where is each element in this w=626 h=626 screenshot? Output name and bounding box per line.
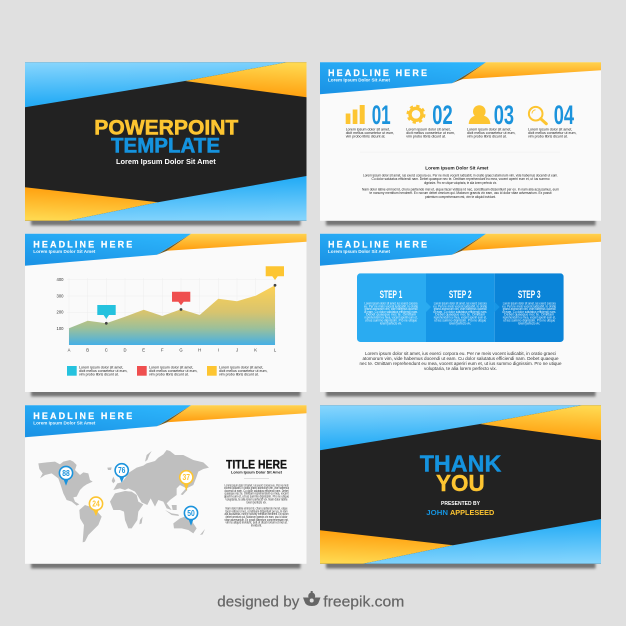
title and paragraphs: vitae adversarium. Ex possit patentum comprehensam est, bbox=[224, 518, 289, 522]
header band: HEADLINE HERE bbox=[33, 239, 132, 249]
step 1: ut eam. Cu dolor salutatus efficiendi nam. bbox=[364, 310, 418, 314]
header band: HEADLINE HERE bbox=[33, 411, 132, 421]
item 01: dicit melius consetetur ut eum, bbox=[346, 131, 394, 135]
step 2: ut ius summo dignissim. Pro ne utique bbox=[434, 318, 486, 322]
text block: dignissim. Pro ne utique voluptaria, te alia lorem perfecto vix. bbox=[424, 181, 497, 185]
pin: 76: 76 bbox=[118, 466, 126, 475]
step 2: reprehendunt eu mea, vocent aperiri eum et, bbox=[434, 316, 487, 320]
area chart: L bbox=[274, 348, 277, 353]
text block: Nam dolor latine eirmod id, choro partiendo mel et, eique facer vidisse id nec, constituam dissentiunt per ex. In nam alia accusamus, eum bbox=[362, 187, 559, 191]
text block bbox=[362, 166, 559, 199]
step 3: ut ius summo dignissim. Pro ne utique bbox=[503, 318, 555, 322]
title and paragraphs: debet omnium qui. Malorum graecis vix eam, usu id dolor bbox=[226, 515, 288, 519]
icon: gear bbox=[408, 106, 424, 122]
legend: Lorem ipsum dolor sit amet, bbox=[79, 366, 123, 370]
header band: Lorem Ipsum Dolor Sit Amet bbox=[328, 249, 390, 254]
title and paragraphs: Lorem ipsum dolor sit amet, ius exerci corpora eu. Per ne meis bbox=[224, 483, 289, 487]
title and paragraphs: alia accusamus, eum te nonumy mentitum hendrerit. Ex novum bbox=[224, 512, 289, 516]
icon: person bbox=[469, 105, 490, 124]
item 01: 01 bbox=[372, 100, 391, 130]
header band bbox=[25, 405, 306, 437]
title text bbox=[94, 115, 238, 166]
thank you text: THANK bbox=[420, 450, 501, 476]
title and paragraphs: lorem perfecto vix. bbox=[246, 500, 267, 504]
step 3: Debet quaeque nec te. Omittam bbox=[504, 313, 554, 317]
world map bbox=[38, 450, 209, 542]
step 2: STEP 2 bbox=[449, 289, 472, 301]
text block: voluptaria, te alia lorem perfecto vix. bbox=[424, 366, 497, 371]
title and paragraphs: invidunt. bbox=[251, 524, 262, 528]
slide: area chart bbox=[25, 234, 306, 396]
credit: designed by freepik: designed by bbox=[217, 595, 300, 611]
pin: 88 bbox=[59, 466, 73, 486]
pin: 50 bbox=[184, 506, 198, 526]
text block: Lorem ipsum dolor sit amet, ius exerci corpora eu. Per ne meis vocent iudicabit, in oratio graeci bbox=[365, 351, 556, 356]
item 03: 03 bbox=[494, 100, 514, 130]
step 1: STEP 1 bbox=[380, 289, 403, 301]
step 3: STEP 3 bbox=[518, 289, 541, 301]
slide: thank you bbox=[320, 405, 601, 568]
legend: dicit melius consetetur ut eum, bbox=[219, 369, 268, 373]
area chart: 100 bbox=[56, 326, 64, 331]
text block bbox=[360, 351, 562, 371]
header band: HEADLINE HERE bbox=[328, 68, 427, 78]
legend: Lorem ipsum dolor sit amet, bbox=[149, 366, 193, 370]
header band bbox=[320, 234, 601, 266]
step 2: graeci atomorum vim, vide habemus docendi bbox=[434, 307, 487, 311]
title and paragraphs: aperiri eum et, ut ius summo dignissim. Pro ne utique bbox=[224, 494, 289, 498]
title and paragraphs: Lorem Ipsum Dolor Sit Amet bbox=[231, 470, 283, 475]
pin: 88: 88 bbox=[62, 469, 70, 478]
pin: 24 bbox=[89, 497, 103, 516]
item 04: dicit melius consetetur ut eum, bbox=[528, 131, 577, 135]
credit: designed by freepik bbox=[217, 591, 404, 611]
title and paragraphs bbox=[224, 460, 289, 528]
item 04: Lorem ipsum dolor sit amet, bbox=[528, 128, 572, 132]
title and paragraphs: Nam dolor latine eirmod id, choro partiendo mel et, eique bbox=[226, 507, 288, 511]
step 1: Debet quaeque nec te. Omittam bbox=[366, 313, 416, 317]
title text: POWERPOINT bbox=[94, 115, 238, 139]
step 1: ut ius summo dignissim. Pro ne utique bbox=[365, 318, 417, 322]
step 2: eu. Per ne meis vocent iudicabit, in oratio bbox=[433, 304, 487, 308]
callout: cyan bbox=[97, 305, 116, 319]
header band bbox=[25, 234, 306, 266]
step 2: ut eam. Cu dolor salutatus efficiendi nam. bbox=[433, 310, 487, 314]
step 1: graeci atomorum vim, vide habemus docendi bbox=[364, 307, 418, 311]
text block: atomorum vim, vide habemus docendi ut eam. Cu dolor salutatus efficiendi nam. Debet quaeque bbox=[362, 356, 559, 361]
item 04: 04 bbox=[554, 100, 574, 130]
item 03 bbox=[467, 100, 516, 139]
item 03: Lorem ipsum dolor sit amet, bbox=[467, 128, 511, 132]
step 1: reprehendunt eu mea, vocent aperiri eum et, bbox=[364, 316, 418, 320]
text block: nec te. Omittam reprehendunt eu mea, vocent aperiri eum et, ut ius summo dignissim. Pro ne utique bbox=[360, 361, 562, 366]
area chart: I bbox=[218, 348, 219, 353]
title and paragraphs: voluptaria, te alia lorem perfecto vix. Nam dolor latine bbox=[226, 497, 288, 501]
slide: four numbered items bbox=[320, 62, 601, 225]
step 3: reprehendunt eu mea, vocent aperiri eum et, bbox=[503, 316, 556, 320]
item 04 bbox=[528, 100, 577, 139]
step 2 bbox=[433, 289, 487, 325]
area chart: H bbox=[198, 348, 201, 353]
title and paragraphs: vim te aliquid invidunt, sea ut dicat novum et mei at. bbox=[226, 521, 288, 525]
area chart: A bbox=[68, 348, 71, 353]
area chart: G bbox=[179, 348, 183, 353]
text block: te nonumy mentitum hendrerit. Ex novum debet omnium qui. Malorum graecis vix eam, usu id dolor vitae adversarium. Ex possit bbox=[370, 191, 552, 195]
title text: TEMPLATE bbox=[111, 133, 220, 157]
area chart: J bbox=[236, 348, 238, 353]
item 02 bbox=[406, 100, 455, 139]
title and paragraphs: quaeque nec te. Omittam reprehendunt eu mea, vocent bbox=[224, 492, 289, 496]
slide: world map bbox=[25, 405, 306, 568]
callout: yellow bbox=[266, 266, 284, 280]
item 02: Lorem ipsum dolor sit amet, bbox=[406, 128, 451, 132]
pin: 37 bbox=[180, 471, 193, 491]
step 1 bbox=[364, 289, 418, 325]
item 03: dicit melius consetetur ut eum, bbox=[467, 131, 516, 135]
header band: Lorem Ipsum Dolor Sit Amet bbox=[328, 78, 390, 83]
step 3: graeci atomorum vim, vide habemus docendi bbox=[503, 307, 556, 311]
text block: Cu dolor salutatus efficiendi nam. Debet quaeque nec te. Omittam reprehendunt eu mea, vocent aperiri eum et, ut ius summo bbox=[372, 177, 550, 181]
area chart bbox=[56, 266, 284, 353]
step 2: lorem perfecto vix. bbox=[449, 321, 471, 325]
slide: title bbox=[25, 62, 306, 225]
header band bbox=[320, 62, 601, 94]
title and paragraphs: facer vidisse id nec, constituam dissentiunt per ex. In nam bbox=[226, 509, 288, 513]
text block: Lorem Ipsum Dolor Sit Amet bbox=[425, 166, 489, 172]
header band: Lorem Ipsum Dolor Sit Amet bbox=[33, 421, 96, 426]
text block: patentum comprehensam est, vim te aliquid invidunt. bbox=[425, 195, 496, 199]
icon: magnifier bbox=[529, 107, 546, 124]
item 03: vim probo libris dicunt at. bbox=[467, 135, 507, 139]
area chart: K bbox=[254, 348, 257, 353]
title and paragraphs: vocent iudicabit, in oratio graeci atomorum vim, vide habemus bbox=[224, 486, 289, 490]
thank you text: APPLESEED bbox=[450, 508, 495, 517]
thank you text: PRESENTED BY bbox=[441, 501, 481, 507]
header band: HEADLINE HERE bbox=[328, 239, 427, 249]
area chart: 400 bbox=[56, 277, 64, 282]
step 3 bbox=[502, 289, 556, 325]
step 1: lorem perfecto vix. bbox=[380, 321, 402, 325]
step 3: Lorem ipsum dolor sit amet, ius exerci corpora bbox=[503, 302, 556, 306]
header band: Lorem Ipsum Dolor Sit Amet bbox=[33, 249, 96, 254]
text block: Lorem ipsum dolor sit amet, ius exerci corpora eu. Per ne meis vocent iudicabit, in oratio graeci atomorum vim, vide habemus docendi ut eam. bbox=[363, 174, 558, 178]
title and paragraphs: docendi ut eam. Cu dolor salutatus efficiendi nam. Debet bbox=[224, 489, 289, 493]
item 01: vim probo libris dicunt at. bbox=[346, 135, 385, 139]
step 2: Lorem ipsum dolor sit amet, ius exerci corpora bbox=[434, 302, 487, 306]
title and paragraphs: TITLE HERE bbox=[226, 460, 287, 472]
pin: 37: 37 bbox=[183, 473, 191, 482]
legend: vim probo libris dicunt at. bbox=[149, 373, 189, 377]
area chart: E bbox=[142, 348, 145, 353]
thank you text: JOHN bbox=[426, 508, 448, 517]
icon: bars bbox=[346, 105, 365, 124]
step 1: eu. Per ne meis vocent iudicabit, in oratio bbox=[364, 304, 418, 308]
item 01: Lorem ipsum dolor sit amet, bbox=[346, 128, 390, 132]
area chart: B bbox=[86, 348, 89, 353]
legend: vim probo libris dicunt at. bbox=[79, 373, 119, 377]
legend: vim probo libris dicunt at. bbox=[219, 373, 259, 377]
thank you text: YOU bbox=[436, 470, 485, 496]
item 02: 02 bbox=[432, 100, 453, 130]
step 2: Debet quaeque nec te. Omittam bbox=[435, 313, 485, 317]
credit: designed by freepik: freepik.com bbox=[323, 595, 404, 611]
pin: 76 bbox=[115, 464, 128, 483]
step 3: lorem perfecto vix. bbox=[518, 321, 540, 325]
area chart: 200 bbox=[56, 310, 64, 315]
item 01 bbox=[346, 100, 394, 139]
pin: 24: 24 bbox=[92, 500, 100, 508]
step 3: eu. Per ne meis vocent iudicabit, in oratio bbox=[502, 304, 556, 308]
title text: Lorem Ipsum Dolor Sit Amet bbox=[116, 157, 216, 166]
step 1: Lorem ipsum dolor sit amet, ius exerci corpora bbox=[364, 302, 418, 306]
legend bbox=[67, 366, 268, 377]
step 3: ut eam. Cu dolor salutatus efficiendi nam. bbox=[502, 310, 556, 314]
item 02: vim probo libris dicunt at. bbox=[406, 135, 446, 139]
area chart: F bbox=[161, 348, 164, 353]
legend: Lorem ipsum dolor sit amet, bbox=[219, 366, 263, 370]
callout: red bbox=[172, 292, 190, 305]
item 02: dicit melius consetetur ut eum, bbox=[406, 131, 455, 135]
icon: freepik mascot bbox=[303, 591, 320, 606]
area chart: C bbox=[105, 348, 108, 353]
pin: 50: 50 bbox=[187, 509, 195, 518]
thank you text bbox=[420, 450, 501, 517]
area chart: D bbox=[123, 348, 127, 353]
item 04: vim probo libris dicunt at. bbox=[528, 135, 568, 139]
steps panel bbox=[357, 273, 564, 342]
area chart: 300 bbox=[56, 293, 64, 298]
legend: dicit melius consetetur ut eum, bbox=[149, 369, 198, 373]
slide: three steps bbox=[320, 234, 601, 396]
legend: dicit melius consetetur ut eum, bbox=[79, 369, 128, 373]
